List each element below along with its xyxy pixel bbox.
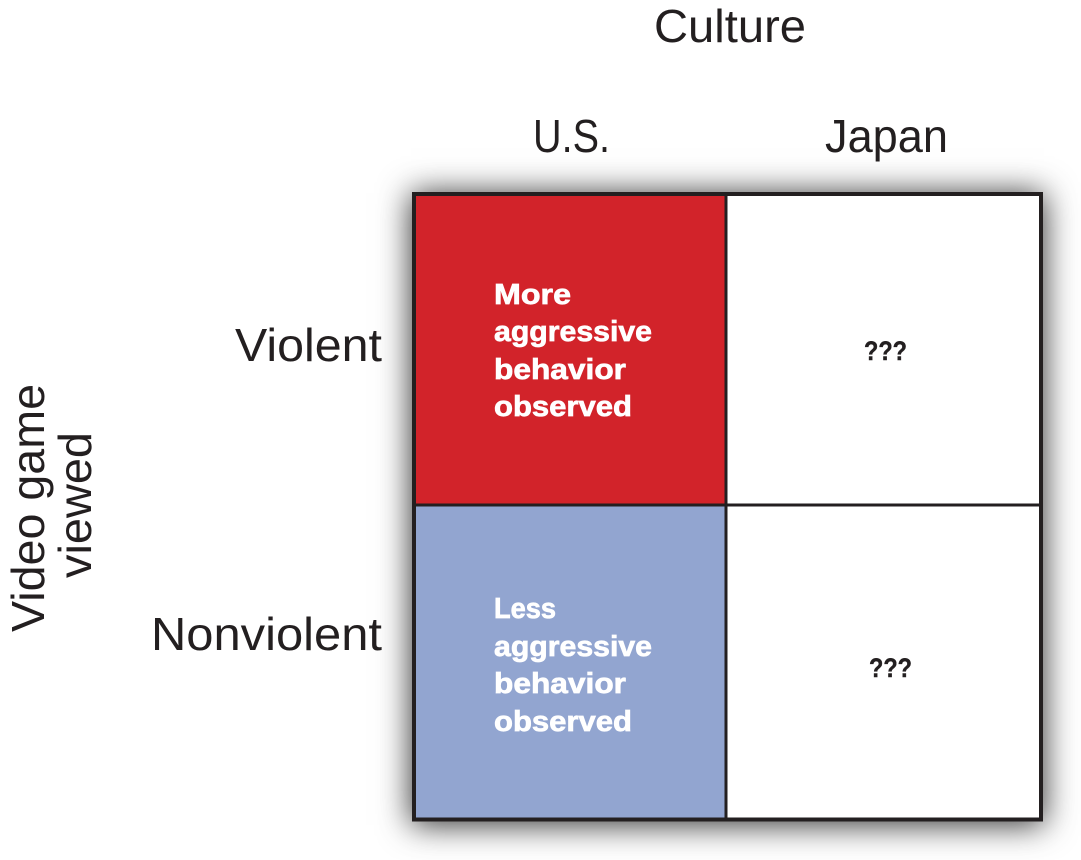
grid lines bbox=[414, 194, 1041, 820]
matrix drop shadow bbox=[414, 194, 1041, 820]
text: less aggressive behavior observed: observed bbox=[494, 706, 632, 738]
text: more aggressive behavior observed: behavior bbox=[494, 354, 626, 386]
matrix bbox=[414, 194, 1041, 820]
text: unknown Japan nonviolent: ??? bbox=[869, 653, 912, 683]
row heading: Nonviolent: Nonviolent bbox=[151, 608, 382, 660]
title: Culture: Culture bbox=[654, 0, 806, 52]
column heading: U.S.: U.S. bbox=[533, 110, 610, 162]
row heading: Violent: Violent bbox=[235, 319, 382, 371]
column heading: Japan: Japan bbox=[825, 110, 948, 162]
text: less aggressive behavior observed: behavior bbox=[494, 668, 626, 700]
cell: Japan nonviolent bbox=[726, 505, 1041, 820]
cell: Japan violent bbox=[726, 194, 1041, 505]
text: less aggressive behavior observed: Less bbox=[494, 593, 556, 625]
text: more aggressive behavior observed: observed bbox=[494, 391, 632, 423]
axis title: Video game viewed: Video game bbox=[2, 384, 54, 632]
text: less aggressive behavior observed: aggressive bbox=[494, 631, 652, 663]
axis title: Video game viewed: viewed bbox=[49, 432, 101, 578]
cell: U.S. violent bbox=[414, 194, 726, 505]
axis title: Video game viewed bbox=[2, 384, 101, 632]
text: more aggressive behavior observed: aggressive bbox=[494, 316, 652, 348]
text: unknown Japan violent: ??? bbox=[864, 336, 907, 366]
text: more aggressive behavior observed: More bbox=[494, 279, 571, 311]
cell: U.S. nonviolent bbox=[414, 505, 726, 820]
